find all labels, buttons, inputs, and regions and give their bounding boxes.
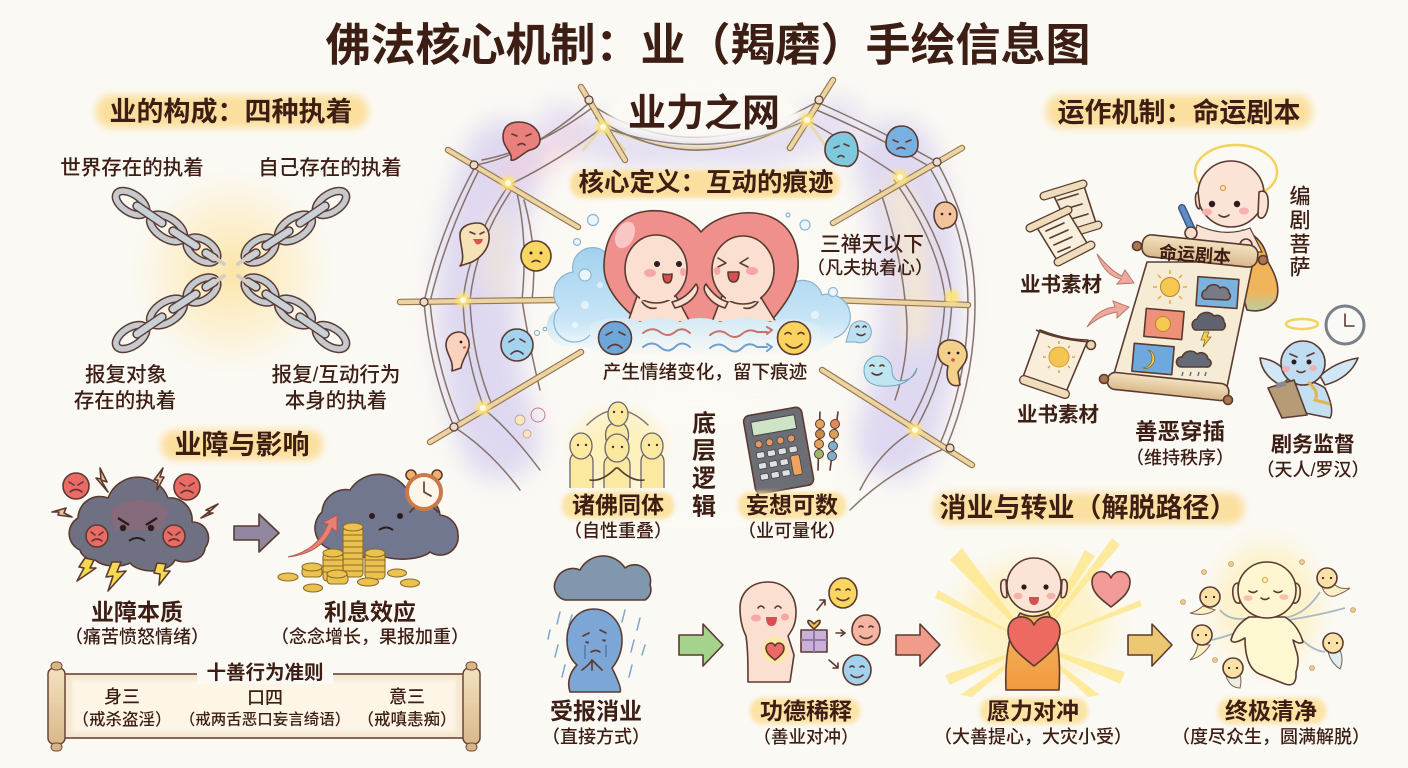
label: 业书素材 upper: 业书素材 — [1020, 274, 1102, 296]
label: 世界存在的执着: 世界存在的执着 — [60, 156, 204, 180]
right character — [704, 236, 776, 322]
label: 编剧菩萨: 菩 — [1290, 234, 1310, 256]
heading: 运作机制: 运作机制：命运剧本 — [1058, 97, 1300, 128]
icon: giver figure — [740, 582, 796, 682]
icon: rain cloud — [554, 556, 651, 600]
icon: rising arrow — [288, 515, 337, 557]
small bubbles lower left — [515, 408, 545, 438]
label: 业障本质: 业障本质 — [91, 599, 183, 625]
panel: 业力之网 — [400, 80, 975, 541]
label: 底层逻辑: 辑 — [692, 494, 716, 520]
label: 善恶穿插: （维持秩序） — [1126, 448, 1234, 468]
text: 三禅天以下: 三禅天以下 — [820, 234, 924, 256]
label: 善恶穿插: 善恶穿插 — [1135, 420, 1225, 444]
label: 利息效应: 利息效应 — [324, 599, 416, 625]
arrow: green — [679, 624, 723, 666]
text: 三禅天以下: （凡夫执着心） — [807, 258, 933, 278]
heading: 消业与转业: 消业与转业（解脱路径） — [940, 493, 1236, 523]
heart — [604, 211, 798, 322]
label: 身三: （戒杀盗淫） — [72, 710, 172, 729]
blue foam cloud — [547, 248, 850, 352]
text: 三禅天以下 — [807, 234, 933, 278]
icon: calculator — [743, 406, 814, 494]
bubbles — [574, 213, 838, 296]
icon: sad face — [598, 322, 632, 354]
small arrows — [817, 600, 845, 668]
label: 口四: （戒两舌恶口妄言绮语） — [180, 710, 350, 728]
label: 利息效应 — [271, 599, 469, 647]
red angry blob — [503, 122, 540, 160]
label: 编剧菩萨: 编 — [1290, 186, 1310, 208]
label: 自己存在的执着: 自己存在的执着 — [258, 156, 402, 180]
heading: 业的构成: 业的构成：四种执着 — [110, 97, 352, 127]
label: 报复对象存在的执着: 报复对象 — [85, 364, 167, 386]
label: 编剧菩萨: 剧 — [1290, 210, 1310, 232]
text: 产生情绪变化: 产生情绪变化，留下痕迹 — [603, 362, 808, 382]
icon: coins — [278, 523, 420, 592]
label: 报复对象存在的执着: 存在的执着 — [74, 390, 176, 412]
icons: receiving faces — [829, 578, 880, 685]
rope knots — [420, 96, 954, 452]
rain — [548, 610, 645, 677]
heading: 业障与影响: 业障与影响 — [174, 430, 310, 460]
label: 报复/互动行为本身的执着: 本身的执着 — [285, 390, 387, 412]
peach climber — [446, 332, 469, 371]
panel: 消业与转业 — [542, 493, 1370, 747]
label: 诸佛同体: （自性重叠） — [564, 521, 672, 541]
panel: 运作机制 — [1017, 95, 1370, 480]
label: 底层逻辑: 层 — [692, 438, 716, 464]
yellow hanging figure — [938, 340, 967, 386]
label: 善恶穿插 — [1126, 420, 1234, 468]
icon: big heart — [1008, 617, 1060, 666]
label: 妄想可数: 妄想可数 — [746, 492, 838, 518]
tan blob right — [934, 202, 957, 229]
heading: 业力之网: 业力之网 — [628, 93, 780, 135]
icon: floating heart — [1092, 572, 1130, 607]
blue sad face — [501, 327, 547, 361]
label: 受报消业 — [542, 698, 650, 747]
step: 愿力对冲 — [934, 538, 1142, 747]
web glow nodes — [456, 113, 959, 437]
teal worried blob — [825, 132, 858, 166]
wave arrows — [643, 327, 772, 352]
heading: 核心定义: 核心定义：互动的痕迹 — [578, 169, 834, 197]
icon: angel supervisor — [1260, 306, 1364, 418]
label: 报复/互动行为本身的执着 — [272, 364, 400, 412]
label: 愿力对冲: 愿力对冲 — [987, 698, 1079, 724]
label: 底层逻辑: 逻 — [692, 466, 716, 492]
arrow: lower to script — [1087, 301, 1129, 327]
label: 命运剧本 on scroll: 命运剧本 — [1158, 242, 1232, 267]
sparkles — [1180, 560, 1356, 670]
web centre clear — [567, 170, 827, 380]
label: 编剧菩萨: 萨 — [1290, 256, 1310, 280]
label: 愿力对冲 — [934, 698, 1132, 747]
label: 底层逻辑: 底 — [692, 410, 716, 438]
web ropes — [400, 80, 972, 465]
label: 报复/互动行为本身的执着: 报复/互动行为 — [272, 364, 400, 386]
glow — [1197, 525, 1337, 685]
label: 受报消业: （直接方式） — [542, 727, 650, 747]
icon: luminous ghost — [1231, 562, 1303, 685]
arrow: upper to script — [1097, 254, 1134, 284]
chain glow — [127, 167, 337, 377]
icon: destiny script scroll — [1100, 234, 1268, 404]
icon: crying person — [567, 609, 622, 692]
label: 功德稀释: （善业对冲） — [754, 727, 858, 747]
label: 身三: 身三 — [104, 687, 140, 707]
title: 佛法核心机制：业（羯磨）手绘信息图 — [325, 20, 1091, 70]
label: 口四: 口四 — [247, 688, 283, 708]
left laughing ghost — [460, 223, 489, 266]
white halo behind heading — [609, 84, 799, 140]
icon: light rays — [934, 538, 1142, 698]
panel: 业的构成 — [60, 95, 402, 412]
panel icons — [1132, 270, 1239, 376]
label: 妄想可数: （业可量化） — [738, 521, 846, 541]
icon: interest cloud with coins and clock — [278, 470, 458, 592]
label: 口四 — [180, 688, 350, 728]
label: 意三 — [358, 687, 456, 729]
panel: 十善行为准则 scroll — [48, 662, 480, 751]
icon: glowing monk — [1001, 558, 1067, 690]
arrow: red — [896, 624, 940, 666]
icon: 诸佛同体 figures — [559, 398, 675, 502]
web threads — [424, 102, 975, 510]
label: 编剧菩萨 — [1290, 186, 1310, 280]
label: 功德稀释: 功德稀释 — [760, 698, 852, 724]
arrow: cause to effect — [234, 514, 279, 552]
label: 业障本质: （痛苦愤怒情绪） — [65, 627, 209, 647]
left character — [625, 235, 698, 322]
icon: karma paper scrolls — [1030, 184, 1098, 262]
icon: abacus beads — [814, 412, 840, 470]
label: 诸佛同体: 诸佛同体 — [572, 492, 664, 518]
label: 受报消业: 受报消业 — [550, 698, 642, 724]
label: 身三 — [72, 687, 172, 729]
label: 底层逻辑 — [692, 410, 716, 520]
yellow sad face — [521, 241, 551, 271]
panel: 业障与影响 — [48, 430, 480, 751]
blue crying blob — [886, 126, 918, 157]
label: 意三: 意三 — [389, 687, 425, 707]
label: 剧务监督 — [1256, 434, 1370, 480]
icon: angry storm cloud — [52, 468, 218, 591]
icon: sun scroll — [1023, 330, 1096, 394]
label: 终极清净: 终极清净 — [1225, 698, 1317, 724]
label: 业障本质 — [65, 599, 209, 647]
cloud base — [590, 317, 820, 356]
teal smile ghost — [864, 356, 917, 386]
illustration: heart with two characters — [547, 211, 850, 356]
step: 受报消业 — [542, 556, 651, 747]
step: 终极清净 — [1172, 525, 1370, 747]
label: 利息效应: （念念增长，果报加重） — [271, 626, 469, 647]
icon: gift box — [801, 620, 827, 652]
label: 终极清净 — [1172, 698, 1370, 747]
label: 诸佛同体 — [562, 492, 674, 541]
label: 剧务监督: 剧务监督 — [1271, 434, 1355, 456]
label: 妄想可数 — [738, 492, 846, 541]
arrow: yellow — [1128, 624, 1172, 666]
label: 功德稀释 — [750, 698, 860, 747]
emotion characters on web — [446, 122, 967, 386]
label: 十善行为准则: 十善行为准则 — [206, 662, 324, 684]
icon: monk writer — [1182, 145, 1278, 311]
label: 意三: （戒嗔恚痴） — [358, 710, 456, 729]
step: 功德稀释 — [740, 578, 880, 747]
label: 剧务监督: （天人/罗汉） — [1256, 460, 1370, 480]
white halo behind lower items — [555, 395, 845, 535]
label: 报复对象存在的执着 — [74, 364, 176, 412]
icon: happy face — [778, 322, 810, 354]
blue smile bubble — [846, 321, 871, 343]
icon: alarm clock — [406, 470, 442, 512]
connecting strands — [1212, 592, 1345, 652]
label: 愿力对冲: （大善提心，大灾小受） — [934, 727, 1132, 747]
web background wash — [476, 120, 920, 440]
icon: small heart — [766, 643, 784, 660]
label: 业书素材 lower: 业书素材 — [1017, 404, 1099, 426]
icons: small saved figures — [1190, 568, 1350, 688]
icon: four chains converging — [112, 186, 350, 354]
label: 终极清净: （度尽众生，圆满解脱） — [1172, 727, 1370, 747]
